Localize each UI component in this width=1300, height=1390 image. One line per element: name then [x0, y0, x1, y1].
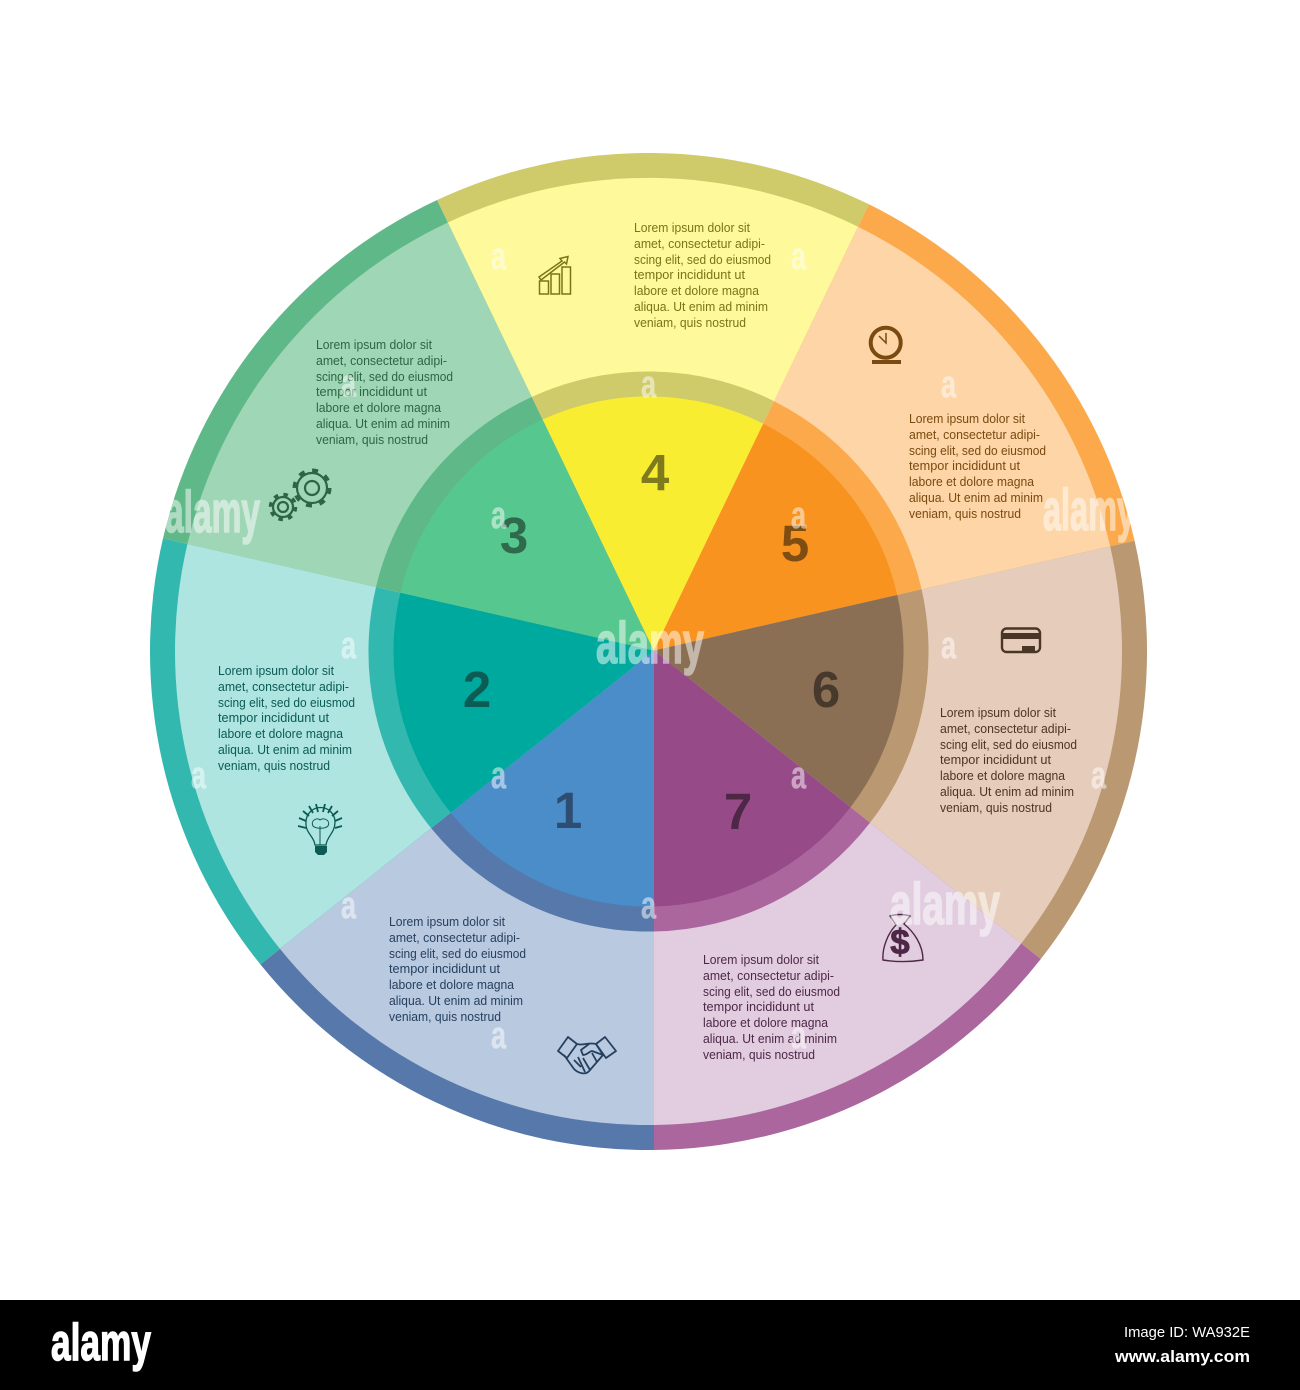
panel: segment 3 [163, 200, 654, 650]
panel: segment 7 [654, 650, 1041, 1150]
number 3: 3 [500, 507, 528, 564]
text block: segment 5: amet, consectetur adipi- [909, 428, 1040, 442]
panel: segment 2 [150, 538, 654, 964]
text block: segment 1: aliqua. Ut enim ad minim [389, 994, 523, 1008]
icon: money bag [883, 914, 923, 962]
text block: segment 1: amet, consectetur adipi- [389, 931, 520, 945]
watermark: alamy overlays: a [1091, 755, 1107, 797]
text block: segment 7: scing elit, sed do eiusmod [703, 985, 840, 999]
watermark: alamy overlays: a [641, 885, 657, 927]
text block: segment 7: veniam, quis nostrud [703, 1048, 815, 1062]
watermark: alamy overlays: a [791, 495, 807, 537]
footer website: www.alamy.com [1114, 1347, 1250, 1366]
watermark: alamy overlays: a [341, 625, 357, 667]
text block: segment 6: scing elit, sed do eiusmod [940, 738, 1077, 752]
watermark: alamy overlays: alamy [1043, 478, 1135, 543]
icon: gears [270, 470, 330, 520]
watermark: alamy overlays [165, 236, 1135, 1057]
text block: segment 7: amet, consectetur adipi- [703, 969, 834, 983]
text block: segment 1: Lorem ipsum dolor sit [389, 915, 506, 929]
text block: segment 1 [389, 915, 526, 1024]
text block: segment 5: aliqua. Ut enim ad minim [909, 491, 1043, 505]
footer bar [0, 1300, 1300, 1390]
text block: segment 1: scing elit, sed do eiusmod [389, 947, 526, 961]
watermark: alamy overlays: a [941, 364, 957, 406]
number 4: 4 [641, 444, 670, 501]
text block: segment 7: aliqua. Ut enim ad minim [703, 1032, 837, 1046]
text block: segment 4: aliqua. Ut enim ad minim [634, 300, 768, 314]
icon: clock [871, 328, 901, 364]
text block: segment 5 [909, 412, 1046, 521]
watermark: alamy overlays: alamy [890, 872, 1000, 937]
text block: segment 2 [218, 664, 355, 773]
text block: segment 2: veniam, quis nostrud [218, 759, 330, 773]
text block: segment 3: veniam, quis nostrud [316, 433, 428, 447]
text block: segment 5: tempor incididunt ut [909, 459, 1021, 473]
text block: segment 3: aliqua. Ut enim ad minim [316, 417, 450, 431]
text block: segment 4: tempor incididunt ut [634, 268, 746, 282]
text block: segment 7 [703, 953, 840, 1062]
text block: segment 6: labore et dolore magna [940, 769, 1065, 783]
footer logo: alamy [51, 1314, 151, 1372]
watermark: alamy overlays: a [941, 625, 957, 667]
text block: segment 3: Lorem ipsum dolor sit [316, 338, 433, 352]
text block: segment 2: amet, consectetur adipi- [218, 680, 349, 694]
number 6: 6 [812, 661, 840, 718]
watermark: alamy overlays: a [191, 755, 207, 797]
text block: segment 4: scing elit, sed do eiusmod [634, 253, 771, 267]
text block: segment 6: veniam, quis nostrud [940, 801, 1052, 815]
text block: segment 1: tempor incididunt ut [389, 962, 501, 976]
watermark: alamy overlays: a [491, 1015, 507, 1057]
text block: segment 3 [316, 338, 453, 447]
text block: segment 2: scing elit, sed do eiusmod [218, 696, 355, 710]
text block: segment 2: Lorem ipsum dolor sit [218, 664, 335, 678]
watermark: alamy overlays: alamy [165, 480, 260, 545]
text block: segment 6: Lorem ipsum dolor sit [940, 706, 1057, 720]
text block: segment 2: tempor incididunt ut [218, 711, 330, 725]
number 7: 7 [724, 783, 752, 840]
text block: segment 1: labore et dolore magna [389, 978, 514, 992]
icon: light bulb [298, 804, 342, 855]
watermark: alamy overlays: a [791, 1015, 807, 1057]
text block: segment 6: tempor incididunt ut [940, 753, 1052, 767]
text block: segment 3: labore et dolore magna [316, 401, 441, 415]
panel: segment 4 [437, 153, 869, 650]
watermark: alamy overlays: a [491, 755, 507, 797]
text block: segment 3: scing elit, sed do eiusmod [316, 370, 453, 384]
watermark: alamy overlays: a [791, 755, 807, 797]
icon: handshake [558, 1037, 616, 1073]
panel: segment 6 [654, 541, 1147, 959]
text block: segment 4: amet, consectetur adipi- [634, 237, 765, 251]
number 5: 5 [781, 515, 809, 572]
number 2: 2 [463, 661, 491, 718]
text block: segment 6 [940, 706, 1077, 815]
text block: segment 7: labore et dolore magna [703, 1016, 828, 1030]
watermark: alamy overlays: a [491, 495, 507, 537]
text block: segment 5: labore et dolore magna [909, 475, 1034, 489]
watermark: alamy overlays: a [641, 364, 657, 406]
text block: segment 4: veniam, quis nostrud [634, 316, 746, 330]
watermark: alamy overlays: a [491, 236, 507, 278]
text block: segment 4 [634, 221, 771, 330]
text block: segment 5: Lorem ipsum dolor sit [909, 412, 1026, 426]
text block: segment 3: tempor incididunt ut [316, 385, 428, 399]
footer image id: Image ID: WA932E [1124, 1324, 1250, 1341]
text block: segment 1: veniam, quis nostrud [389, 1010, 501, 1024]
panel: segment 1 [260, 650, 654, 1150]
watermark: alamy overlays: alamy [596, 611, 704, 676]
watermark: alamy overlays: a [341, 885, 357, 927]
text block: segment 7: Lorem ipsum dolor sit [703, 953, 820, 967]
icon: credit card [1002, 628, 1040, 652]
watermark: alamy overlays: a [341, 363, 357, 405]
icon: growth chart [539, 256, 570, 294]
number 1: 1 [554, 782, 582, 839]
panel: segment 5 [654, 204, 1135, 651]
text block: segment 7: tempor incididunt ut [703, 1000, 815, 1014]
text block: segment 4: Lorem ipsum dolor sit [634, 221, 751, 235]
text block: segment 5: veniam, quis nostrud [909, 507, 1021, 521]
icon: money bag: $ [890, 923, 910, 962]
text block: segment 2: labore et dolore magna [218, 727, 343, 741]
text block: segment 5: scing elit, sed do eiusmod [909, 444, 1046, 458]
text block: segment 6: amet, consectetur adipi- [940, 722, 1071, 736]
watermark: alamy overlays: a [791, 236, 807, 278]
text block: segment 3: amet, consectetur adipi- [316, 354, 447, 368]
text block: segment 4: labore et dolore magna [634, 284, 759, 298]
text block: segment 6: aliqua. Ut enim ad minim [940, 785, 1074, 799]
text block: segment 2: aliqua. Ut enim ad minim [218, 743, 352, 757]
